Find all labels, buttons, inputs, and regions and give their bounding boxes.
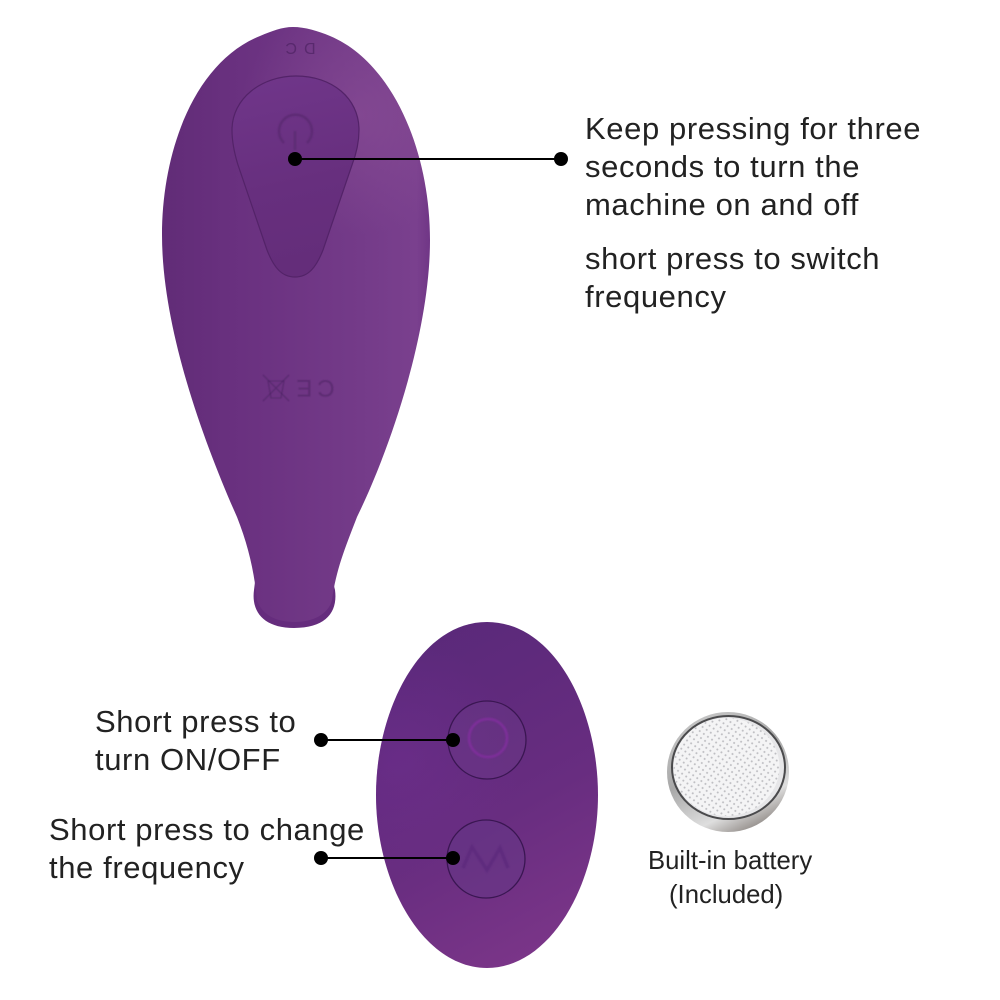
device body [162, 27, 430, 628]
text: frequency label: Short press to change [49, 812, 365, 847]
leader line: frequency [314, 851, 460, 865]
power button [232, 76, 359, 277]
text: power button instructions: Keep pressing for three [585, 111, 921, 146]
text: power button instructions: seconds to turn the [585, 149, 860, 184]
text: short press to switch: short press to switch [585, 241, 880, 276]
text: battery caption [648, 847, 812, 909]
text: power button instructions [585, 111, 921, 222]
leader line: power button [288, 152, 568, 166]
certification marks: CE [291, 374, 335, 401]
leader line: on/off [314, 733, 460, 747]
text: on/off label: Short press to [95, 704, 296, 739]
text: on/off label: turn ON/OFF [95, 742, 281, 777]
text: short press to switch: frequency [585, 279, 727, 314]
text: on/off label [95, 704, 296, 777]
frequency button [447, 820, 525, 898]
coin battery [667, 712, 789, 832]
text: frequency label [49, 812, 365, 885]
text: short press to switch [585, 241, 880, 314]
remote control [376, 622, 598, 968]
text: frequency label: the frequency [49, 850, 245, 885]
text: battery caption: (Included) [669, 881, 783, 909]
on/off button [448, 701, 526, 779]
text: power button instructions: machine on and off [585, 187, 859, 222]
label: DC: DC [278, 39, 316, 56]
text: battery caption: Built-in battery [648, 847, 812, 875]
certification marks [263, 374, 335, 401]
